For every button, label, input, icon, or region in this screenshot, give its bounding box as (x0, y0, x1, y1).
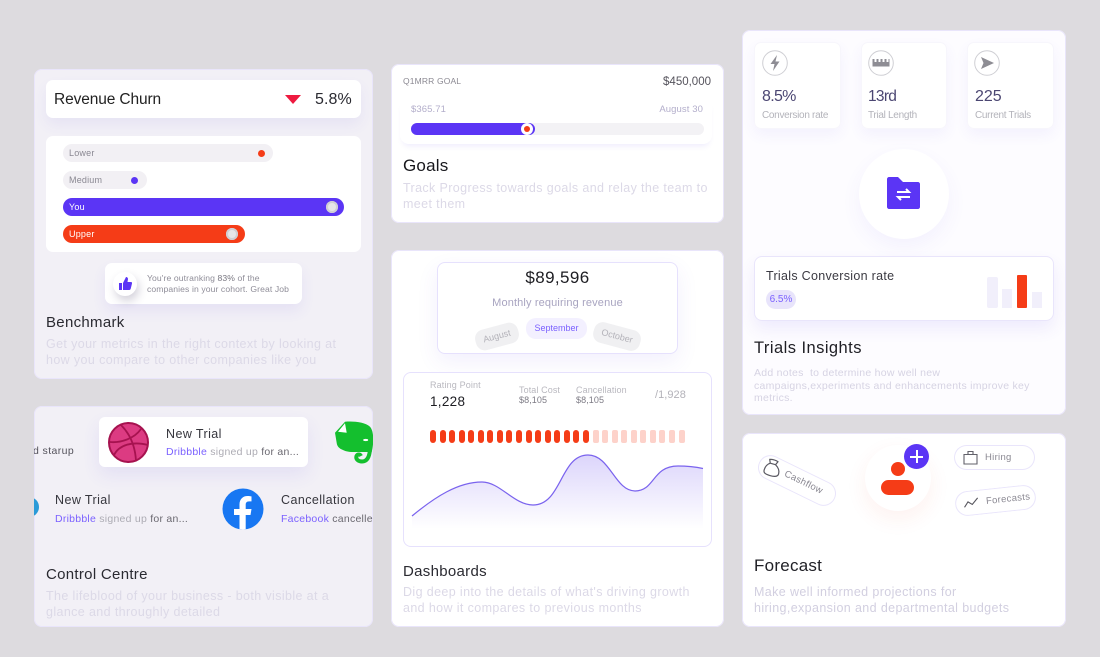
cancellation: Cancellation (576, 384, 627, 394)
icon: partial blue logo (19, 497, 39, 517)
conversion pill: 6.5% (770, 294, 792, 305)
cancellation row item (281, 493, 373, 525)
chip: october: October (600, 327, 634, 345)
bar: you: You (69, 202, 85, 212)
benchmark heading: Benchmark (46, 314, 125, 331)
panel: benchmark (34, 69, 373, 379)
dashboards heading: Dashboards (403, 563, 487, 580)
control centre description: The lifeblood of your business - both visible at a (46, 589, 329, 603)
total cost: Total Cost (519, 384, 560, 394)
new trial row item (55, 493, 188, 525)
rating point label: Rating Point (430, 380, 481, 390)
icon: evernote (335, 422, 373, 464)
panel: control centre (34, 406, 373, 627)
icon: line chart (964, 498, 978, 508)
cashflow pill (754, 451, 840, 510)
plus badge (904, 444, 929, 469)
current trials value: 225 (975, 88, 1002, 105)
benchmark description: Get your metrics in the right context by looking at (46, 337, 336, 351)
monthly revenue card (437, 262, 678, 354)
cancellation: $8,105 (576, 395, 604, 405)
trials conversion card (754, 256, 1054, 321)
forecast description (754, 585, 1009, 615)
avatar head (890, 462, 904, 476)
churn value: 5.8% (315, 91, 352, 108)
goal amount: $450,000 (663, 76, 711, 88)
progress date: August 30 (659, 104, 703, 115)
avatar add icon (870, 444, 929, 516)
trial length label: Trial Length (868, 110, 917, 121)
callout text (147, 273, 289, 294)
benchmark description: how you compare to other companies like you (46, 353, 317, 367)
rating point value: 1,228 (430, 394, 465, 409)
goal label: Q1MRR GOAL (403, 76, 461, 86)
new trial title: New Trial (166, 427, 222, 441)
progress start value: $365.71 (411, 104, 446, 115)
new trial highlighted card (99, 417, 308, 467)
bar: you (63, 198, 344, 216)
control centre description (46, 589, 329, 619)
trials insights description (754, 367, 1030, 404)
area chart (412, 454, 704, 516)
panel: goals (391, 64, 724, 223)
icon: dribbble (108, 422, 149, 463)
goals description: meet them (403, 197, 465, 211)
bar: upper: Upper (69, 229, 95, 239)
stat card: trial length (861, 42, 947, 129)
total cost: $8,105 (519, 395, 547, 405)
dashboards description: Dig deep into the details of what's driving growth (403, 585, 690, 599)
panel: forecast (742, 433, 1066, 627)
goals description (403, 181, 708, 211)
total cost (519, 384, 560, 405)
chip: august: August (482, 328, 512, 344)
stat card: conversion rate (754, 42, 841, 129)
mini bar chart (987, 275, 1042, 308)
trial length value: 13rd (868, 88, 896, 105)
icon: lightning (762, 50, 788, 76)
conversion pill (766, 290, 796, 309)
revenue amount: $89,596 (525, 268, 590, 287)
new trial row item: Dribbble signed up for an... (55, 513, 188, 525)
hiring pill (954, 445, 1035, 470)
progress fill (411, 123, 535, 135)
revenue label: Monthly requiring revenue (492, 297, 623, 309)
trials insights heading: Trials Insights (754, 339, 862, 357)
forecasts pill (954, 484, 1037, 517)
icon: ruler (868, 50, 894, 76)
icon: facebook (222, 488, 264, 530)
goals heading: Goals (403, 156, 448, 175)
chip: september (526, 318, 587, 339)
conversion value: 8.5% (762, 88, 796, 105)
goals description: Track Progress towards goals and relay the team to (403, 181, 708, 195)
forecast heading: Forecast (754, 556, 822, 575)
total rating: /1,928 (655, 389, 686, 401)
chip: august (473, 321, 521, 352)
rating tick bars (430, 430, 685, 443)
clipped startup text: d starup (34, 445, 74, 457)
forecast description: Make well informed projections for (754, 585, 957, 599)
icon: paper plane (974, 50, 1000, 76)
icon: folder in circle (859, 149, 949, 239)
progress track (411, 123, 704, 135)
progress knob (521, 123, 533, 135)
progress panel (400, 100, 712, 144)
metrics and chart card (403, 372, 712, 547)
forecasts label: Forecasts (985, 491, 1031, 506)
hiring label: Hiring (985, 452, 1012, 462)
icon: thumbs up (113, 272, 137, 296)
trials insights description: metrics. (754, 392, 793, 404)
cashflow label: Cashflow (782, 469, 825, 497)
panel: dashboards (391, 250, 724, 627)
dashboards description: and how it compares to previous months (403, 601, 642, 615)
new trial row item: New Trial (55, 493, 111, 507)
trials insights description: Add notes to determine how well new (754, 367, 940, 379)
chip: september: September (534, 323, 579, 333)
revenue churn label: Revenue Churn (54, 91, 161, 108)
chip: october (591, 320, 643, 353)
callout text: You're outranking 83% of the (147, 273, 260, 283)
conversion label: Conversion rate (762, 110, 828, 121)
outranking callout (105, 263, 302, 304)
icon: briefcase (963, 451, 978, 464)
dashboards description (403, 585, 690, 615)
bar: lower: Lower (69, 148, 95, 158)
avatar body (881, 480, 914, 495)
bar: lower (63, 144, 273, 162)
benchmark bars panel (46, 136, 361, 252)
benchmark description (46, 337, 336, 367)
current trials label: Current Trials (975, 110, 1031, 121)
trials insights description: campaigns,experiments and enhancements improve key (754, 380, 1030, 392)
stat card: current trials (967, 42, 1054, 129)
control centre description: glance and throughly detailed (46, 605, 220, 619)
new trial subtitle: Dribbble signed up for an... (166, 446, 299, 458)
panel: trials insights (742, 30, 1066, 415)
icon: money bag (763, 458, 780, 477)
bar: medium: Medium (69, 175, 102, 185)
bar: upper (63, 225, 245, 243)
control centre heading: Control Centre (46, 566, 148, 583)
icon: down triangle (285, 95, 301, 104)
bar: medium (63, 171, 147, 189)
callout text: companies in your cohort. Great Job (147, 284, 289, 294)
cancellation (576, 384, 627, 405)
revenue churn header (46, 80, 361, 118)
trials conversion title: Trials Conversion rate (766, 269, 894, 283)
avatar circle (865, 445, 931, 511)
cancellation row item: Cancellation (281, 493, 355, 507)
forecast description: hiring,expansion and departmental budgets (754, 601, 1009, 615)
